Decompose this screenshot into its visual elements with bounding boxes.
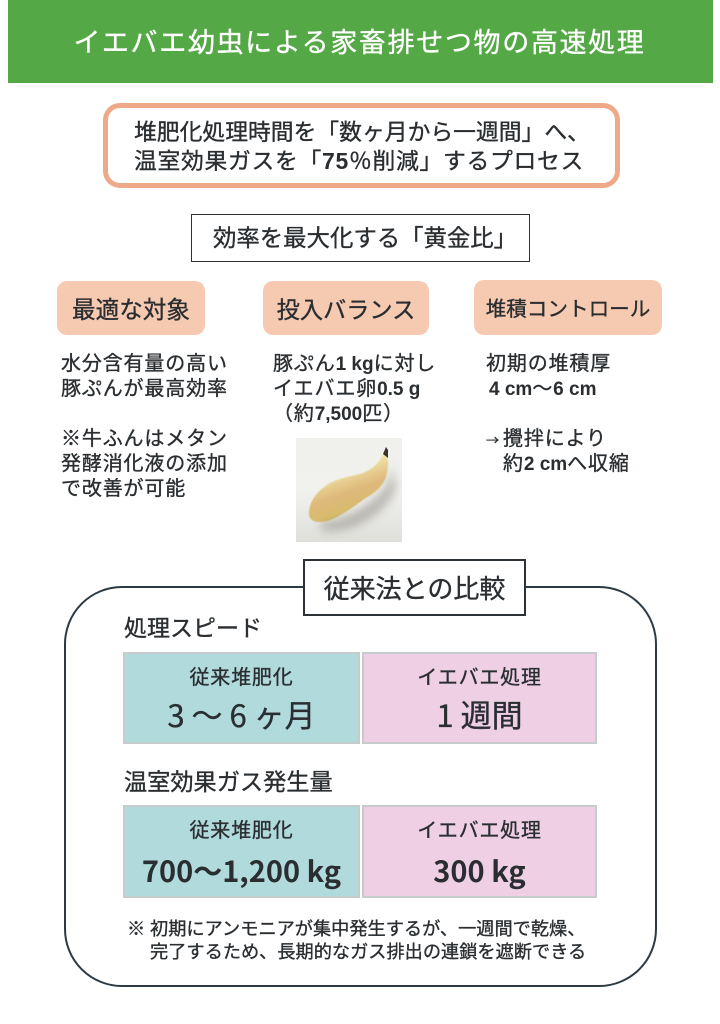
speed larvae value: 1 週間 [436,691,523,736]
footnote: ※ [127,915,145,941]
pile shrink text: → [486,430,499,449]
balance text: イエバエ卵0.5 g [273,372,420,401]
pill heading: pile: 堆積コントロール [486,292,650,322]
column: pile control [474,280,662,476]
pile depth text: 4 cm～6 cm [489,372,596,401]
comparison heading [303,559,526,616]
summary text [134,114,590,176]
title banner [8,0,713,83]
column: input balance [263,281,436,542]
ghg conventional value: 700～1,200 kg [142,849,341,891]
balance text [273,347,436,426]
speed: conventional [123,652,360,744]
section heading text: 効率を最大化する「黄金比」 [213,219,517,253]
ghg larvae label: イエバエ処理 [417,814,542,843]
target note: で改善が可能 [61,472,186,501]
ghg larvae value: 300 kg [433,849,526,891]
comparison heading text: 従来法との比較 [324,569,505,606]
ghg: fly larvae [362,805,597,898]
footnote: 完了するため、長期的なガス排出の連鎖を遮断できる [150,938,586,964]
ghg heading: 温室効果ガス発生量 [124,763,333,797]
speed larvae label: イエバエ処理 [417,661,542,690]
balance text: 豚ぷん1 kgに対し [273,347,436,376]
pill heading: target [57,281,205,335]
target note: 発酵消化液の添加 [61,447,228,476]
ghg: conventional [123,805,360,898]
speed conventional value: 3 ～ 6 ヶ月 [167,691,316,736]
pill heading: balance: 投入バランス [277,291,415,325]
pile shrink text: 攪拌により [503,422,607,451]
summary text: 温室効果ガスを「75％削減」するプロセス [134,143,584,176]
section heading: golden ratio [191,214,530,262]
speed heading: 処理スピード [124,609,262,643]
pile depth text [486,347,611,401]
summary text: 堆肥化処理時間を「数ヶ月から一週間」へ、 [134,114,590,147]
footnote: 初期にアンモニアが集中発生するが、一週間で乾燥、 [150,915,585,941]
pill heading: pile [474,280,662,335]
footnote [127,915,586,964]
balance text: （約7,500匹） [273,397,404,426]
speed conventional label: 従来堆肥化 [190,661,294,690]
target note [61,422,228,501]
column: optimal target [57,281,228,501]
pile shrink text: 約2 cmへ収縮 [503,447,630,476]
summary callout [103,103,620,188]
speed: fly larvae [362,652,597,744]
photo: fly larva [296,438,402,542]
panel: comparison [64,586,657,987]
title text: イエバエ幼虫による家畜排せつ物の高速処理 [74,21,645,60]
pill heading: target: 最適な対象 [72,291,190,325]
target text [61,347,228,401]
pill heading: balance [263,281,429,335]
pile shrink text [486,422,630,476]
target text: 水分含有量の高い [61,347,228,376]
target text: 豚ぷんが最高効率 [61,372,228,401]
pile depth text: 初期の堆積厚 [486,347,611,376]
target note: ※牛ふんはメタン [61,422,228,451]
ghg conventional label: 従来堆肥化 [190,814,294,843]
